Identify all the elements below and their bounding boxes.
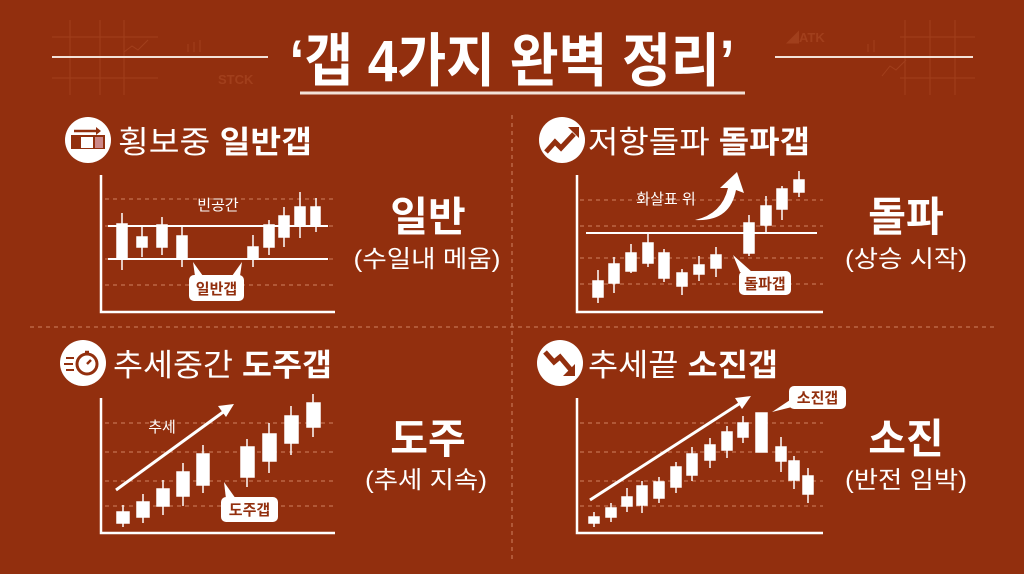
- callout: 일반갭: [189, 262, 244, 301]
- chart: 화살표 위: [636, 191, 696, 208]
- heading: 횡보중 일반갭: [118, 125, 312, 160]
- callout: 도주갭: [221, 482, 278, 522]
- heading: 추세중간 도주갭: [113, 348, 332, 383]
- label: (수일내 메움): [354, 246, 500, 273]
- label: 소진: [868, 416, 944, 462]
- heading: 추세끝 소진갭: [588, 348, 778, 383]
- callout: 돌파갭: [733, 255, 791, 295]
- panel: 일반갭: [65, 117, 500, 312]
- chart: 추세: [148, 419, 176, 436]
- chart: [101, 394, 335, 533]
- decorative background grid: STCK: [218, 72, 254, 87]
- label: 돌파: [868, 194, 944, 240]
- label: (추세 지속): [365, 467, 487, 494]
- icon: zigzag down: [537, 340, 583, 386]
- callout: 소진갭: 소진갭: [797, 390, 838, 407]
- heading: 저항돌파 돌파갭: [588, 125, 810, 160]
- chart: [577, 171, 823, 312]
- label: 도주: [390, 416, 466, 462]
- callout: 소진갭: [772, 386, 846, 412]
- label: [845, 416, 967, 494]
- label: [365, 416, 487, 494]
- callout: 돌파갭: 돌파갭: [744, 276, 786, 293]
- decorative background grid: [52, 20, 975, 95]
- label: (반전 임박): [845, 467, 967, 494]
- icon: stopwatch: [60, 340, 106, 386]
- chart: 빈공간: [197, 197, 239, 214]
- panel: 도주갭: [60, 340, 487, 533]
- callout: 일반갭: 일반갭: [196, 281, 237, 298]
- panel: 소진갭: [537, 340, 967, 533]
- label: [354, 194, 500, 273]
- label: (상승 시작): [845, 246, 967, 273]
- label: [845, 194, 967, 273]
- arrow: curved up: [695, 172, 744, 220]
- arrow: trend up: [116, 404, 234, 490]
- panel: 돌파갭: [539, 117, 967, 312]
- icon: zigzag up: [539, 117, 585, 163]
- label: 일반: [390, 194, 466, 240]
- callout: 도주갭: 도주갭: [229, 502, 270, 519]
- decorative background grid: ◢ATK: [786, 30, 825, 45]
- chart: [101, 175, 335, 312]
- arrow: trend up: [590, 396, 751, 500]
- dividers: [30, 115, 994, 560]
- icon: sideways box: [65, 117, 111, 163]
- title: ‘갭 4가지 완벽 정리’: [290, 29, 734, 94]
- chart: [577, 386, 846, 533]
